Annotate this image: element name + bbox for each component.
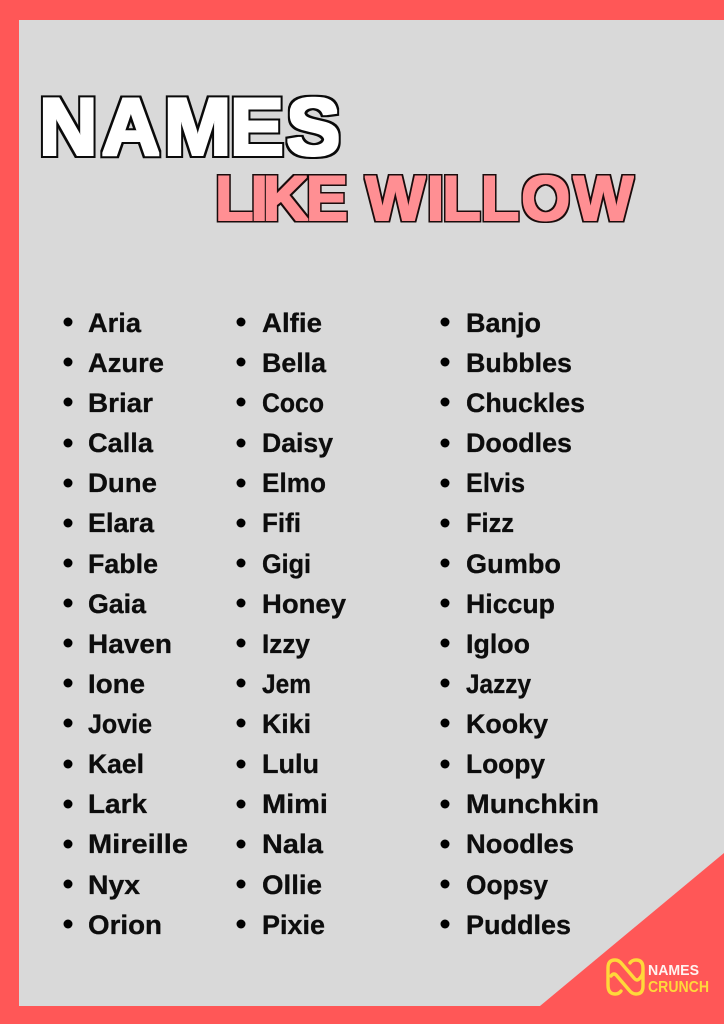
name list column 1: Gaia [88,589,147,619]
name list column 3: Bubbles [466,348,572,378]
logo: NamesCrunch [608,960,709,996]
name list column 2: Jem [262,669,311,699]
name list column 2: Alfie [262,308,322,338]
name list column 3: Doodles [466,428,572,458]
name list column 3: Elvis [466,468,525,498]
name list column 1: Briar [88,388,154,418]
name list column 2: Fifi [262,508,301,538]
name list column 2: Honey [262,589,346,619]
name list column 2: Lulu [262,749,319,779]
name list column 2: Elmo [262,468,326,498]
name list column 1: Haven [88,629,172,659]
name list column 3: Igloo [466,629,530,659]
name list column 3: Munchkin [466,789,599,819]
corner triangle [540,853,724,1006]
name list column 1: Orion [88,910,162,940]
name list column 1: Kael [88,749,144,779]
name list column 3: Gumbo [466,549,561,579]
name list column 2: Mimi [262,789,328,819]
name list column 1: Lark [88,789,148,819]
name list column 2: Daisy [262,428,333,458]
name list column 1: Calla [88,428,154,458]
name list column 2: Coco [262,388,324,418]
name list column 2: Kiki [262,709,311,739]
name list column 3: Chuckles [466,388,585,418]
name list column 2: Nala [262,829,324,859]
title: NAMES: NAMES [39,82,340,172]
subtitle: LIKE WILLOW: LIKE WILLOW [215,164,634,234]
name list column 3: Fizz [466,508,514,538]
name list column 3: Oopsy [466,870,548,900]
name list column 3 [440,308,599,940]
icon: N mark [608,960,643,994]
name list column 3: Jazzy [466,669,531,699]
name list column 2 [236,308,346,940]
name list column 1: Aria [88,308,142,338]
name list column 2: Gigi [262,549,311,579]
name list column 1: Jovie [88,709,152,739]
name list column 3: Banjo [466,308,541,338]
name list column 2: Pixie [262,910,325,940]
name list column 3: Kooky [466,709,548,739]
name list column 2: Izzy [262,629,310,659]
name list column 2: Bella [262,348,327,378]
logo word: NAMES: NAMES [648,962,699,979]
name list column 1: Azure [88,348,164,378]
name list column 3: Loopy [466,749,545,779]
name list column 1: Nyx [88,870,140,900]
name list column 3: Hiccup [466,589,555,619]
name list column 1: Mireille [88,829,188,859]
logo word: CRUNCH: CRUNCH [648,979,709,996]
name list column 1 [64,308,188,940]
name list column 1: Elara [88,508,155,538]
name list column 3: Puddles [466,910,571,940]
name list column 2: Ollie [262,870,322,900]
name list column 1: Ione [88,669,145,699]
name list column 3: Noodles [466,829,574,859]
name list column 1: Dune [88,468,157,498]
name list column 1: Fable [88,549,158,579]
